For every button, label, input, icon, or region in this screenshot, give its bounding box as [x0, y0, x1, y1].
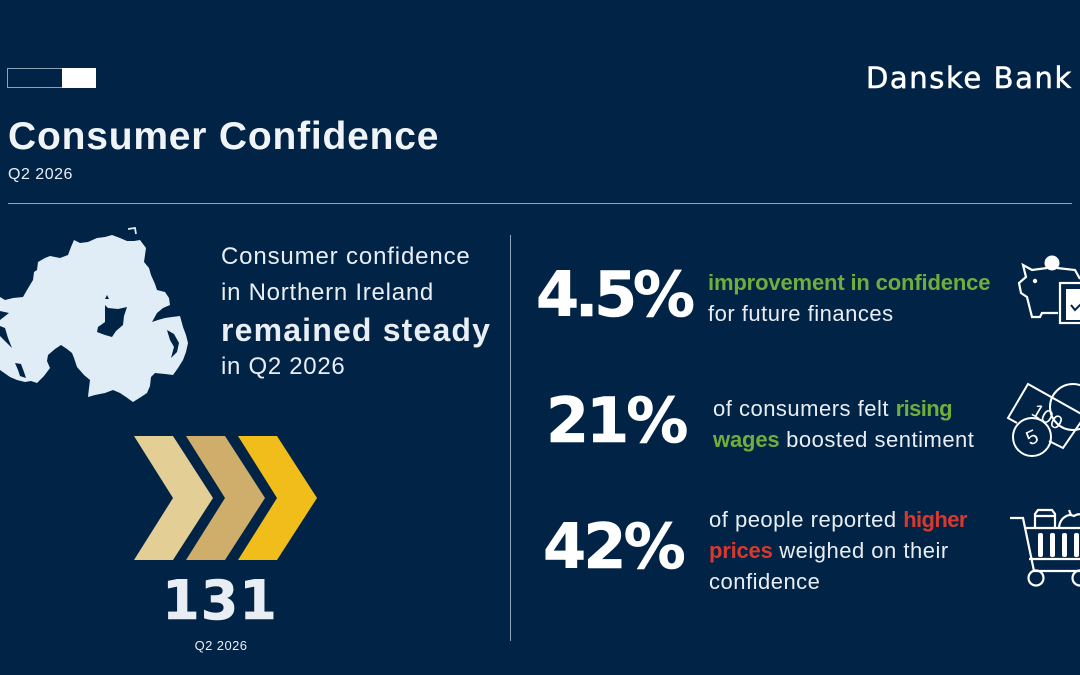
text: consumer confidence summary: [221, 243, 491, 380]
text: consumer confidence summary: remained steady: [221, 312, 491, 348]
stat: 4.5%: 4.5%: [536, 258, 691, 331]
text: future finances: for future finances: [708, 301, 894, 326]
text: future finances: improvement in confidence: [708, 270, 990, 295]
text: rising wages: wages boosted sentiment: [713, 427, 974, 452]
stat: 21%: 21%: [546, 384, 685, 457]
text: rising wages: [713, 396, 974, 452]
stat: 42%: 42%: [543, 510, 683, 583]
brand: Danske Bank: Danske Bank: [866, 61, 1073, 95]
index value: 131: [162, 569, 278, 632]
text: consumer confidence summary: in Northern Ireland: [221, 279, 434, 306]
text: higher prices: of people reported higher: [709, 507, 967, 532]
text: consumer confidence summary: Consumer confidence: [221, 243, 471, 270]
icon: money: 5: [1023, 426, 1042, 450]
text: rising wages: of consumers felt rising: [713, 396, 952, 421]
progress bar logo mark: [7, 68, 96, 88]
text: consumer confidence summary: in Q2 2026: [221, 353, 345, 380]
chevrons arrow: [134, 436, 317, 560]
icon: piggy bank: [1018, 256, 1080, 324]
text: higher prices: confidence: [709, 569, 820, 594]
icon: money: [1006, 382, 1080, 457]
icon: money: 100: [1028, 400, 1066, 434]
text: higher prices: prices weighed on their: [709, 538, 949, 563]
text: higher prices: [709, 507, 968, 594]
text: future finances: [708, 270, 990, 326]
map: Northern Ireland: [0, 227, 188, 402]
index caption: Q2 2026: [195, 638, 247, 653]
title: Consumer Confidence: [8, 115, 439, 158]
icon: shopping cart: [1010, 508, 1080, 587]
subtitle: Q2 2026: [8, 166, 73, 183]
